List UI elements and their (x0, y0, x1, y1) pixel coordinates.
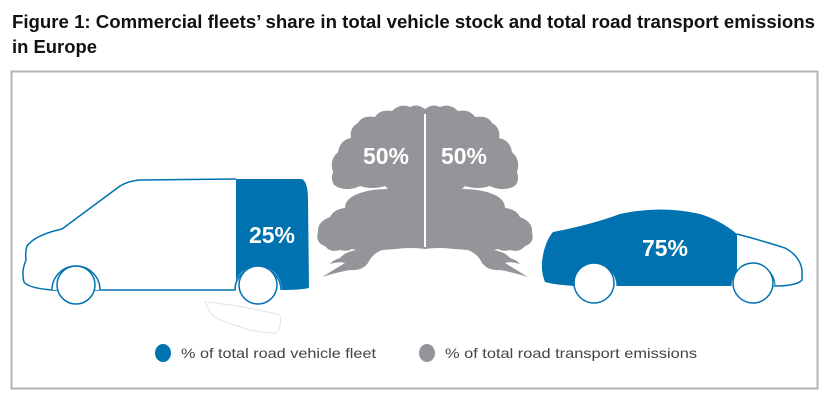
ghost shadow (205, 302, 280, 333)
title: Figure 1: Commercial fleets’ share in total vehicle stock and total road transport emissions (12, 12, 815, 32)
cloud: left (317, 106, 426, 277)
label: 50% right: 50% (441, 143, 487, 169)
cloud divider (424, 114, 426, 247)
cloud: right (424, 106, 533, 277)
car (542, 210, 802, 303)
legend: emissions (419, 344, 697, 362)
van (23, 179, 309, 304)
legend (155, 344, 697, 362)
panel frame (12, 72, 818, 388)
label: 75%: 75% (642, 235, 688, 261)
legend: fleet: % of total road vehicle fleet (181, 345, 376, 361)
legend: fleet (155, 344, 376, 362)
label: 50% left: 50% (363, 143, 409, 169)
label: 25%: 25% (249, 222, 295, 248)
title: in Europe (12, 37, 97, 57)
title (12, 12, 815, 57)
legend: emissions: % of total road transport emissions (445, 345, 697, 361)
